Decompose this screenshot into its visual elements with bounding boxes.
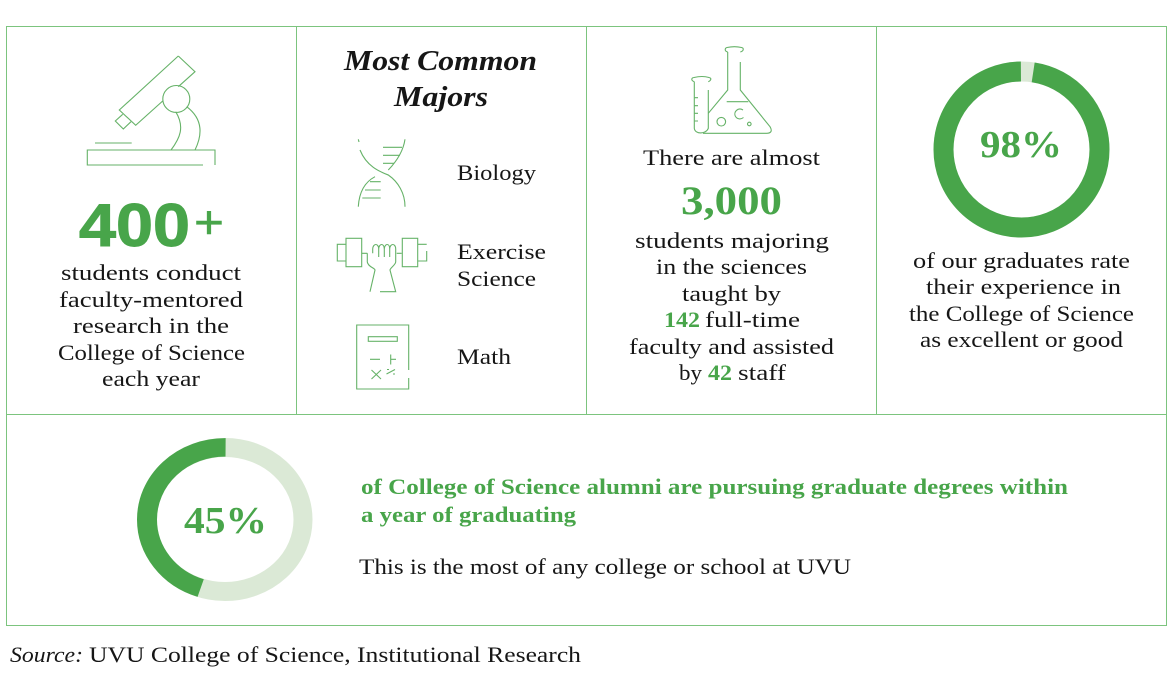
- heading: most common majors: Most Common: [343, 45, 537, 77]
- text: research description: students conduct: [61, 260, 241, 285]
- source note: UVU College of Science, Institutional Research: [89, 642, 581, 667]
- label: exercise science: Exercise: [457, 239, 546, 264]
- text: satisfaction description: [909, 248, 1134, 352]
- heading: most common majors: Majors: [393, 81, 488, 113]
- text: students and faculty description: taught by: [682, 281, 781, 306]
- source note: Source:: [10, 642, 83, 667]
- text: research description: research in the: [73, 313, 229, 338]
- panel: most common majors: [337, 45, 546, 389]
- text: alumni pursuing graduate degrees: [361, 474, 1068, 527]
- text: students and faculty description: by: [679, 360, 702, 385]
- text: most of any college: This is the most of any college or school at UVU: [359, 554, 851, 579]
- text: satisfaction description: their experience in: [926, 274, 1121, 299]
- text: students and faculty description: in the sciences: [656, 254, 807, 279]
- panel: graduate satisfaction: [909, 72, 1134, 352]
- text: research description: College of Science: [58, 340, 245, 365]
- text: research description: [58, 260, 245, 391]
- icon: microscope: [87, 56, 215, 165]
- label: exercise science: Science: [457, 266, 536, 291]
- text: students and faculty description: 142: [664, 307, 700, 332]
- icon: dna: [358, 139, 405, 207]
- stat: 400+: [79, 192, 224, 259]
- chart: 98% donut: [944, 72, 1100, 228]
- icon: flask and test tube: [692, 47, 771, 133]
- text: satisfaction description: as excellent or good: [920, 327, 1123, 352]
- text: research description: each year: [102, 366, 201, 391]
- text: satisfaction description: of our graduates rate: [913, 248, 1130, 273]
- text: alumni pursuing graduate degrees: a year of graduating: [361, 502, 576, 527]
- text: students and faculty description: 42: [708, 360, 732, 385]
- text: alumni pursuing graduate degrees: of College of Science alumni are pursuing graduate degrees within: [361, 474, 1068, 499]
- chart: 45% donut: 45%: [184, 500, 267, 542]
- text: students and faculty description: students majoring: [635, 228, 829, 253]
- text: there are almost: There are almost: [643, 145, 820, 170]
- text: research description: faculty-mentored: [59, 287, 243, 312]
- label: math: Math: [457, 344, 511, 369]
- text: students and faculty description: [629, 228, 834, 385]
- stat: 3,000: 3,000: [681, 178, 782, 223]
- chart: 45% donut: [147, 447, 303, 592]
- panel: students and faculty: [629, 47, 834, 385]
- chart: 98% donut: 98%: [980, 124, 1062, 166]
- text: students and faculty description: staff: [738, 360, 787, 385]
- text: satisfaction description: the College of Science: [909, 301, 1134, 326]
- panel: graduate degrees: [147, 447, 1068, 592]
- text: students and faculty description: full-time: [705, 307, 800, 332]
- label: exercise science: [457, 239, 546, 291]
- stat: 400+: +: [194, 196, 224, 248]
- icon: dumbbell and fist: [337, 238, 427, 292]
- label: biology: Biology: [457, 160, 536, 185]
- icon: math worksheet: [357, 325, 409, 389]
- text: students and faculty description: faculty and assisted: [629, 334, 834, 359]
- heading: most common majors: [343, 45, 537, 113]
- stat: 400+: 400: [79, 192, 190, 259]
- panel: research: [58, 56, 245, 391]
